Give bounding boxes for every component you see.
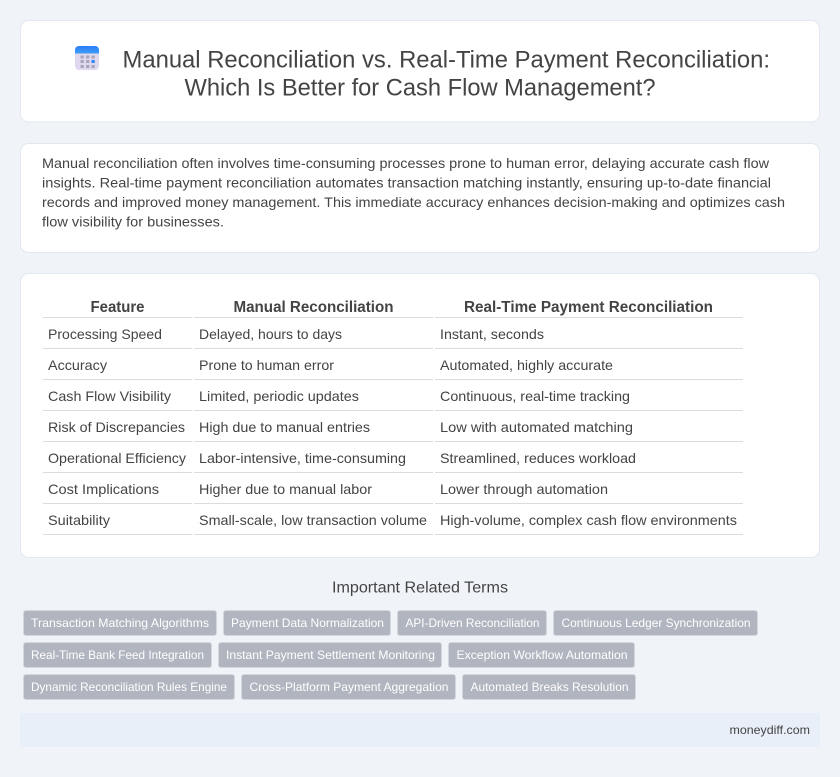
row: operational efficiency: Streamlined, reduces workload [440,450,636,466]
row: suitability: Suitability [48,512,110,528]
row: suitability: High-volume, complex cash flow environments [440,512,737,528]
tag: Cross-Platform Payment Aggregation [250,680,448,694]
row: risk of discrepancies: Low with automated matching [440,419,633,435]
row: accuracy: Prone to human error [199,357,334,373]
text block: description: insights. Real-time payment reconciliation automates transaction matching instantly, ensuring up-to-date financial [42,174,771,190]
text block: description [42,155,785,230]
row: cash flow visibility: Limited, periodic updates [199,388,359,404]
tag: Instant Payment Settlement Monitoring [226,648,435,662]
tag [218,642,442,668]
row: suitability [48,512,737,528]
text block: description: flow visibility for businesses. [42,214,224,230]
panel: title header [20,20,820,122]
tag [242,674,456,700]
row: risk of discrepancies: High due to manual entries [199,419,370,435]
tag [462,674,636,700]
row: operational efficiency: Labor-intensive, time-consuming [199,450,406,466]
text block: description: records and improved money management. This immediate accuracy enhances decision-making and optimizes cash [42,194,785,210]
text block: description: Manual reconciliation often involves time-consuming processes prone to human error, delaying accurate cash flow [42,155,770,171]
tag: Automated Breaks Resolution [470,680,628,694]
row: cost implications: Cost Implications [48,481,159,497]
footer bar: moneydiff.com [730,723,810,737]
tag: Dynamic Reconciliation Rules Engine [31,680,227,694]
tag: API-Driven Reconciliation [406,616,540,630]
row: operational efficiency: Operational Efficiency [48,450,186,466]
tag [24,610,216,636]
table header: Feature [90,299,145,316]
row: accuracy: Automated, highly accurate [440,357,613,373]
row: operational efficiency [48,450,636,466]
row: processing speed: Delayed, hours to days [199,326,342,342]
row: processing speed: Processing Speed [48,326,162,342]
tag: Exception Workflow Automation [456,648,628,662]
row: suitability: Small-scale, low transaction volume [199,512,427,528]
tag: Transaction Matching Algorithms [31,616,209,630]
title: Manual Reconciliation vs. Real-Time Payment Reconciliation: [122,46,770,74]
tag [224,610,390,636]
heading: important related terms: Important Related Terms [332,580,508,596]
row: processing speed: Instant, seconds [440,326,544,342]
row: cash flow visibility: Cash Flow Visibility [48,388,171,404]
row: cost implications: Higher due to manual labor [199,481,372,497]
tag: Continuous Ledger Synchronization [562,616,750,630]
panel: description [20,144,820,252]
tag [398,610,546,636]
tag: Real-Time Bank Feed Integration [31,648,204,662]
row: cost implications [48,481,608,497]
title [122,46,770,102]
row: risk of discrepancies [48,419,633,435]
tag [554,610,758,636]
row: cash flow visibility [48,388,630,404]
table header [90,299,713,316]
panel: comparison table [20,274,820,558]
footer bar [20,713,820,747]
row: risk of discrepancies: Risk of Discrepancies [48,419,185,435]
tag [24,674,234,700]
icon: calendar [75,46,99,70]
panel: related term tags [24,610,758,700]
table header: Real-Time Payment Reconciliation [464,299,713,316]
tag [448,642,634,668]
title: Which Is Better for Cash Flow Management? [184,74,656,102]
row: cash flow visibility: Continuous, real-time tracking [440,388,630,404]
tag [24,642,212,668]
table header: Manual Reconciliation [234,299,394,316]
row: processing speed [48,326,544,342]
tag: Payment Data Normalization [231,616,384,630]
row: accuracy: Accuracy [48,357,107,373]
row: accuracy [48,357,613,373]
row: cost implications: Lower through automation [440,481,608,497]
